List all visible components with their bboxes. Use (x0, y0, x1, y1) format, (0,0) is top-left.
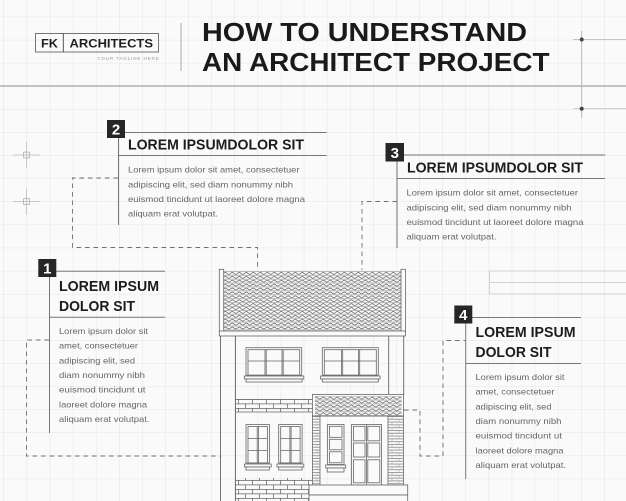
step 1 badge (38, 259, 56, 278)
step 3 body text: aliquam erat volutpat. (406, 232, 496, 242)
front door (352, 424, 382, 485)
header rule (0, 85, 626, 87)
house illustration (219, 269, 408, 501)
step 2 badge (107, 120, 125, 138)
step 1 body text: amet, consectetuer (59, 341, 138, 351)
upper brick band (236, 399, 312, 412)
step 4 body text: adipiscing elit, sed (476, 401, 552, 411)
upper left window (244, 348, 304, 382)
porch (312, 394, 403, 485)
title: AN ARCHITECT PROJECT (202, 49, 550, 77)
step 3 heading: LOREM IPSUMDOLOR SIT (407, 161, 583, 177)
panel: step 2 (107, 120, 327, 225)
step 1 badge: 1 (43, 260, 51, 278)
porch steps (309, 485, 408, 501)
step 1 body text (59, 326, 150, 424)
connector: step 1 to wall (26, 340, 220, 456)
step 1 heading: LOREM IPSUM (59, 279, 159, 295)
step 3 rules (397, 155, 605, 248)
step 4 body text: aliquam erat volutpat. (476, 460, 566, 470)
porch window (326, 424, 346, 472)
icon: drafting marks top right (573, 31, 626, 118)
logo: FK (41, 36, 58, 50)
step 2 heading: LOREM IPSUMDOLOR SIT (128, 138, 304, 154)
panel: step 3 (386, 143, 605, 248)
step 3 body text: adipiscing elit, sed diam nonummy nibh (406, 202, 572, 212)
step 4 body text: laoreet dolore magna (476, 445, 564, 455)
step 4 body text (476, 372, 566, 470)
step 1 body text: euismod tincidunt ut (59, 385, 146, 395)
upper right window (320, 348, 380, 382)
step 3 body text: Lorem ipsum dolor sit amet, consectetuer (406, 188, 578, 198)
icon: crosshair marks left (13, 142, 40, 215)
step 3 body text (406, 188, 584, 242)
step 4 heading: LOREM IPSUM (476, 325, 576, 341)
step 4 rules (466, 317, 581, 479)
step 3 body text: euismod tincidunt ut laoreet dolore magna (406, 217, 584, 227)
lower left window (244, 424, 271, 470)
step 2 body text: euismod tincidunt ut laoreet dolore magna (128, 194, 305, 204)
step 2 body text: adipiscing elit, sed diam nonummy nibh (128, 179, 293, 189)
step 3 badge (386, 143, 404, 162)
step 2 body text: Lorem ipsum dolor sit amet, consectetuer (128, 165, 300, 175)
step 4 heading (476, 325, 576, 361)
step 1 body text: Lorem ipsum dolor sit (59, 326, 149, 336)
step 1 heading: DOLOR SIT (59, 299, 135, 315)
logo: YOUR TAGLINE HERE (97, 56, 159, 61)
lower middle window (277, 424, 304, 470)
house walls (220, 336, 404, 501)
step 1 body text: adipiscing elit, sed (59, 355, 135, 365)
step 2 rules (118, 132, 327, 225)
step 4 badge (454, 306, 472, 324)
lower brick band (236, 478, 312, 501)
step 4 body text: diam nonummy nibh (476, 416, 562, 426)
header divider (180, 23, 182, 71)
main roof (219, 269, 405, 336)
step 4 body text: euismod tincidunt ut (476, 431, 563, 441)
connector: step 4 to porch (404, 340, 465, 456)
step 4 badge: 4 (459, 307, 468, 324)
step 4 body text: Lorem ipsum dolor sit (476, 372, 565, 382)
faint drafting box right (490, 271, 626, 294)
connector: step 3 to roof (362, 202, 397, 270)
step 3 badge: 3 (391, 145, 399, 162)
step 1 heading (59, 279, 159, 315)
panel: step 4 (454, 306, 581, 479)
logo: ARCHITECTS (70, 36, 153, 50)
step 1 body text: laoreet dolore magna (59, 399, 147, 409)
title (202, 19, 550, 77)
panel: step 1 (38, 259, 165, 433)
step 1 rules (50, 271, 165, 433)
logo (36, 34, 159, 61)
step 1 body text: diam nonummy nibh (59, 370, 145, 380)
title: HOW TO UNDERSTAND (202, 19, 527, 47)
step 2 body text: aliquam erat volutpat. (128, 209, 218, 219)
step 2 body text (128, 165, 305, 219)
step 4 heading: DOLOR SIT (476, 345, 552, 361)
step 4 body text: amet, consectetuer (476, 387, 555, 397)
step 2 badge: 2 (112, 122, 120, 138)
connector: step 2 to roof (72, 178, 258, 270)
step 1 body text: aliquam erat volutpat. (59, 414, 150, 424)
